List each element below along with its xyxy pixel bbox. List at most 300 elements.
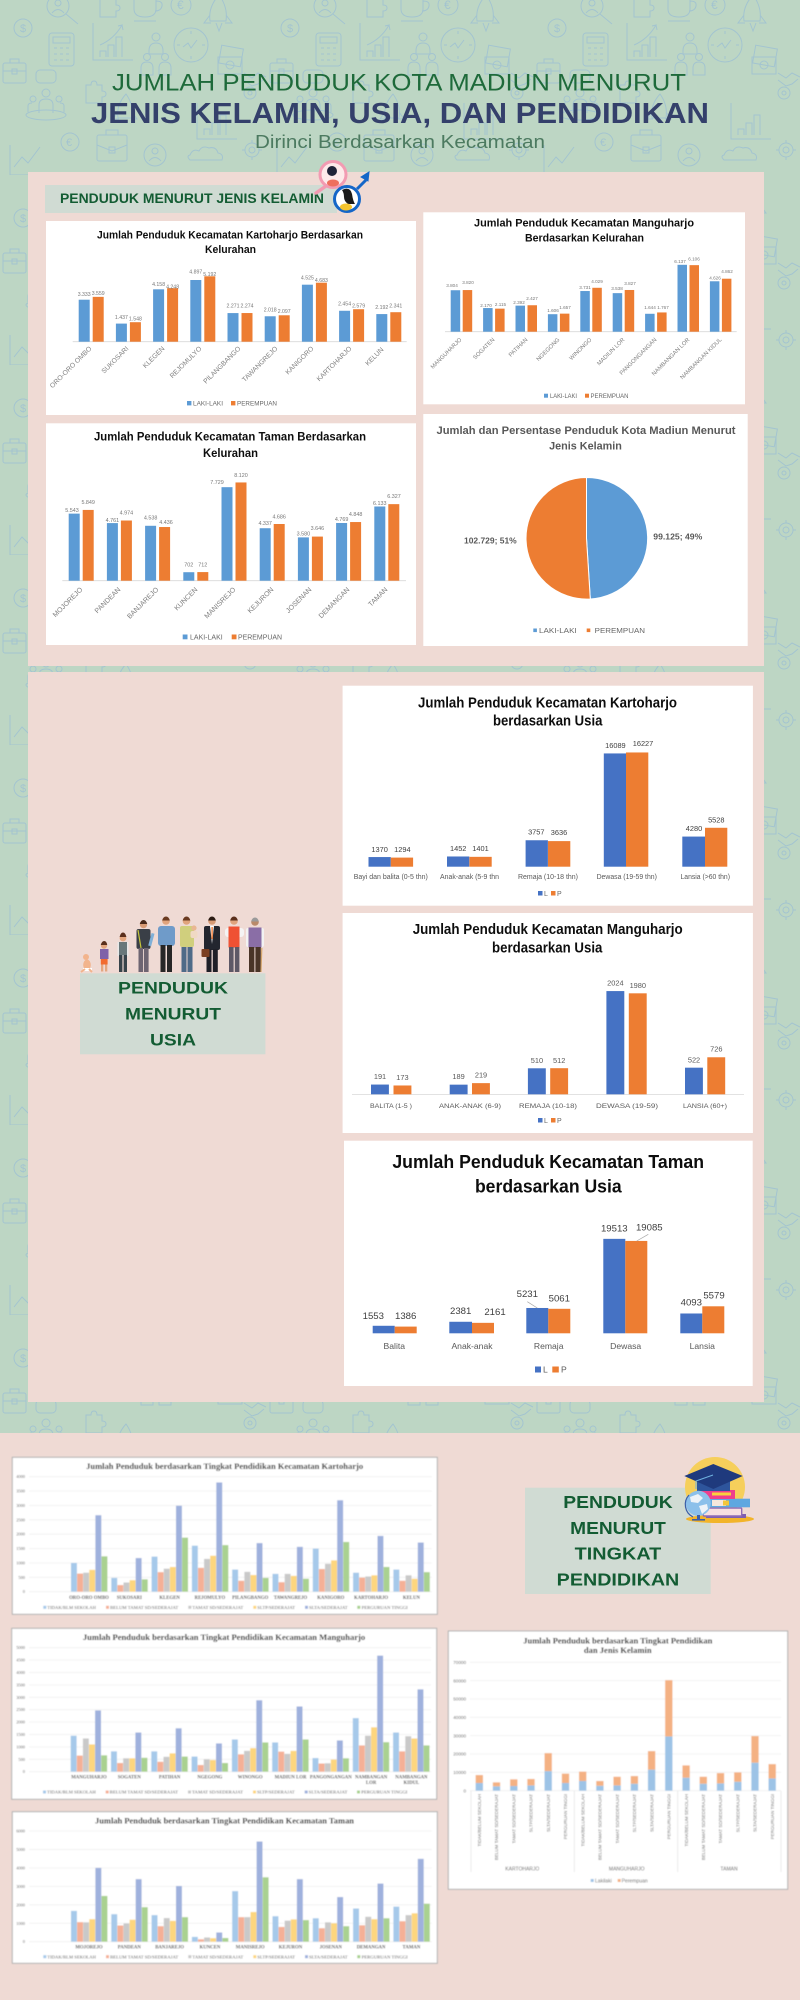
rotated category labels: SLTP/SEDERAJAT xyxy=(736,1794,740,1832)
legend: TIDAK/BLM SEKOLAH xyxy=(47,1954,97,1959)
category labels xyxy=(75,1946,421,1950)
chart title: Kelurahan xyxy=(205,244,256,256)
legend: TAMAT SD/SEDERAJAT xyxy=(192,1790,243,1795)
legend: BELUM TAMAT SD/SEDERAJAT xyxy=(110,1790,178,1795)
rotated category labels: PERGURUAN TINGGI xyxy=(563,1794,568,1839)
y axis labels: 30000 xyxy=(453,1733,466,1738)
category labels: Lansia xyxy=(690,1341,715,1351)
legend: TAMAT SD/SEDERAJAT xyxy=(192,1605,243,1610)
rotated category labels: TAMAT SD/SEDERAJAT xyxy=(512,1794,516,1843)
y axis labels: 70000 xyxy=(453,1660,466,1665)
chart title: Jenis Kelamin xyxy=(549,440,622,452)
chart title xyxy=(94,432,366,460)
y axis labels: 2000 xyxy=(16,1532,26,1537)
y axis labels: 0 xyxy=(23,1769,26,1774)
icon: graduation cap, books and globe xyxy=(684,1457,754,1523)
data labels: 2.427 xyxy=(526,296,538,301)
bars xyxy=(371,991,725,1094)
legend: L xyxy=(543,1364,548,1374)
data labels: 1553 xyxy=(363,1311,384,1322)
y axis labels: 4000 xyxy=(16,1865,26,1870)
data labels: 2161 xyxy=(484,1307,506,1318)
y axis labels: 4000 xyxy=(16,1474,26,1479)
data labels xyxy=(363,1222,725,1322)
chart: Manguharjo kelurahan xyxy=(423,212,745,404)
legend xyxy=(43,1790,408,1795)
category labels: LOR xyxy=(366,1781,377,1786)
category labels: Balita xyxy=(384,1341,405,1351)
category labels: KANIGORO xyxy=(285,345,315,376)
y axis labels: 1000 xyxy=(16,1921,26,1926)
data labels: 191 xyxy=(374,1072,386,1081)
data labels: 4.848 xyxy=(349,512,362,518)
legend: Perempuan xyxy=(622,1878,648,1884)
icon: gender symbols xyxy=(316,162,369,212)
data labels: 2381 xyxy=(450,1306,471,1317)
legend: PEREMPUAN xyxy=(238,634,282,642)
category labels: NGEGONG xyxy=(197,1776,223,1780)
y axis labels: 5000 xyxy=(16,1645,26,1650)
data labels: 5.543 xyxy=(65,508,79,514)
rotated category labels: BELUM TAMAT SD/SEDERAJAT xyxy=(598,1794,603,1860)
y axis labels: 4500 xyxy=(16,1658,26,1663)
legend: BELUM TAMAT SD/SEDERAJAT xyxy=(110,1605,179,1610)
subtitle: Dirinci Berdasarkan Kecamatan xyxy=(255,132,545,152)
data labels: 1452 xyxy=(450,844,466,853)
data labels: 510 xyxy=(531,1056,543,1065)
group labels: KARTOHARJO xyxy=(505,1866,539,1872)
category labels: PANGONGANGAN xyxy=(310,1776,352,1780)
rotated category labels: PERGURUAN TINGGI xyxy=(666,1794,672,1839)
category labels: BALITA (1-5 ) xyxy=(370,1103,412,1110)
category labels: LANSIA (60+) xyxy=(683,1103,727,1110)
y axis labels xyxy=(453,1660,466,1793)
data labels: 702 xyxy=(184,562,193,568)
category labels: WINONGO xyxy=(569,337,594,362)
category labels: Remaja xyxy=(534,1341,564,1351)
category labels xyxy=(384,1341,715,1351)
data labels: 4.436 xyxy=(159,520,173,526)
legend: PEREMPUAN xyxy=(590,394,628,400)
legend xyxy=(538,891,562,898)
category labels: PILANGBANGO xyxy=(202,345,242,385)
y axis labels: 3500 xyxy=(16,1682,26,1687)
y axis labels: 6000 xyxy=(16,1828,26,1834)
y axis labels: 1500 xyxy=(16,1732,26,1737)
rotated category labels: SLTP/SEDERAJAT xyxy=(529,1794,534,1832)
group labels: MANGUHARJO xyxy=(609,1866,645,1872)
category labels: NGEGONG xyxy=(536,337,562,363)
data labels: 6.327 xyxy=(387,494,401,500)
chart title: Jumlah dan Persentase Penduduk Kota Madiun Menurut xyxy=(436,425,736,437)
y axis labels: 3000 xyxy=(16,1884,26,1889)
data labels: 2.018 xyxy=(264,308,277,314)
heading: penduduk menurut usia: PENDUDUK xyxy=(118,978,229,998)
heading: penduduk menurut usia: MENURUT xyxy=(125,1004,222,1024)
data labels xyxy=(371,739,725,854)
legend: P xyxy=(557,891,562,898)
data labels: 2.392 xyxy=(513,300,525,305)
category labels: REMAJA (10-18) xyxy=(519,1103,577,1110)
category labels: KIDUL xyxy=(404,1781,419,1786)
data labels: 4.761 xyxy=(106,518,119,524)
category labels: SUKOSARI xyxy=(117,1596,142,1601)
data labels: 3636 xyxy=(551,828,567,837)
category labels xyxy=(69,1596,420,1601)
data labels xyxy=(446,256,733,313)
category labels: KLEGEN xyxy=(159,1596,180,1601)
data labels: 4.029 xyxy=(591,279,603,284)
rotated category labels: TIDAK/BELUM SEKOLAH xyxy=(477,1794,482,1847)
heading: penduduk menurut tingkat pendidikan: MENURUT xyxy=(570,1518,666,1538)
data labels: 4.686 xyxy=(272,514,286,520)
chart title xyxy=(523,1636,713,1655)
category labels: KANIGORO xyxy=(317,1596,345,1601)
y axis labels xyxy=(16,1828,26,1944)
legend: LAKI-LAKI xyxy=(193,400,223,408)
data labels: 4.769 xyxy=(335,517,348,523)
category labels: SUKOSARI xyxy=(101,345,130,375)
chart title: Jumlah Penduduk berdasarkan Tingkat Pendidikan Kecamatan Manguharjo xyxy=(83,1633,365,1642)
chart title xyxy=(436,425,736,452)
legend: LAKI-LAKI xyxy=(550,394,577,400)
chart title: Jumlah Penduduk Kecamatan Manguharjo xyxy=(474,218,694,230)
data labels: 2.579 xyxy=(352,304,365,310)
category labels: ANAK-ANAK (6-9) xyxy=(439,1103,501,1110)
category labels: KLEGEN xyxy=(142,345,166,370)
data labels: 3.580 xyxy=(297,532,310,538)
legend: SLTA/SEDERAJAT xyxy=(309,1954,348,1959)
chart title: Jumlah Penduduk Kecamatan Manguharjo xyxy=(413,921,683,938)
pie labels: 99.125; 49% xyxy=(653,532,702,542)
chart: Manguharjo usia xyxy=(343,913,753,1133)
legend: SLTP/SEDERAJAT xyxy=(257,1605,295,1610)
category labels: MOJOREJO xyxy=(52,586,85,619)
chart title: Jumlah Penduduk Kecamatan Taman xyxy=(392,1152,704,1172)
category labels: BANJAREJO xyxy=(126,586,161,621)
y axis labels xyxy=(16,1474,26,1594)
chart: pendidikan Manguharjo xyxy=(12,1628,437,1799)
category labels: PANDEAN xyxy=(94,586,122,615)
data labels: 3.333 xyxy=(78,292,91,298)
data labels: 4.337 xyxy=(258,521,272,527)
legend xyxy=(535,1364,567,1374)
bars xyxy=(368,752,727,867)
data labels: 1386 xyxy=(395,1311,416,1322)
data labels: 4.862 xyxy=(721,269,733,274)
y axis labels: 3500 xyxy=(16,1489,26,1494)
data labels: 19085 xyxy=(636,1222,663,1234)
rotated category labels: TIDAK/BELUM SEKOLAH xyxy=(580,1794,585,1847)
category labels: KARTOHARJO xyxy=(354,1596,388,1601)
legend xyxy=(533,628,645,635)
chart title: berdasarkan Usia xyxy=(492,940,603,956)
category labels: MOJOREJO xyxy=(75,1946,103,1950)
panel: usia background xyxy=(28,672,764,1402)
legend xyxy=(591,1878,648,1884)
y axis labels: 1000 xyxy=(16,1560,26,1566)
category labels: MADIUN LOR xyxy=(275,1776,307,1780)
category labels: PILANGBANGO xyxy=(232,1596,269,1601)
chart title xyxy=(392,1152,704,1196)
data labels: 4.158 xyxy=(152,282,165,288)
bars xyxy=(79,276,401,342)
data labels: 1.644 xyxy=(644,305,656,310)
data labels: 522 xyxy=(688,1056,700,1064)
bars xyxy=(71,1482,430,1592)
category labels: KELUN xyxy=(403,1596,420,1601)
chart title: Jumlah Penduduk Kecamatan Kartoharjo xyxy=(418,694,677,712)
data labels: 2.115 xyxy=(495,302,507,307)
heading: penduduk menurut usia xyxy=(80,973,265,1054)
chart: pie jenis kelamin xyxy=(423,414,748,646)
category labels: TAWANGREJO xyxy=(241,345,279,384)
category labels: Dewasa (19-59 thn) xyxy=(597,874,657,881)
chart title: berdasarkan Usia xyxy=(493,712,603,730)
legend: SLTP/SEDERAJAT xyxy=(257,1954,295,1959)
data labels: 5.849 xyxy=(81,500,95,506)
category labels: REJOMULYO xyxy=(195,1596,226,1601)
category labels: KARTOHARJO xyxy=(316,345,353,383)
rotated category labels: TAMAT SD/SEDERAJAT xyxy=(718,1794,723,1843)
chart: Kartoharjo kelurahan xyxy=(46,221,416,415)
category labels: ORO-ORO OMBO xyxy=(49,345,93,390)
chart title: Jumlah Penduduk Kecamatan Taman Berdasarkan xyxy=(94,432,366,444)
legend xyxy=(187,400,277,408)
category labels: Anak-anak (5-9 thn xyxy=(440,874,499,881)
data labels: 6.106 xyxy=(688,256,700,262)
chart: pendidikan dan jenis kelamin stacked xyxy=(448,1631,788,1889)
y axis labels: 2500 xyxy=(16,1517,26,1522)
chart title: Berdasarkan Kelurahan xyxy=(525,232,644,244)
legend xyxy=(43,1954,408,1959)
data labels: 5.192 xyxy=(203,272,216,278)
y axis labels: 50000 xyxy=(453,1697,466,1702)
heading: penduduk menurut jenis kelamin xyxy=(45,185,337,213)
y axis labels: 0 xyxy=(23,1939,26,1944)
y axis labels: 0 xyxy=(463,1788,466,1793)
data labels: 2.192 xyxy=(375,305,388,311)
category labels: WINONGO xyxy=(238,1776,263,1780)
data labels: 3.559 xyxy=(92,291,105,297)
data labels: 726 xyxy=(710,1044,722,1054)
heading: penduduk menurut tingkat pendidikan: TINGKAT xyxy=(575,1544,662,1564)
data labels: 3.820 xyxy=(462,280,474,285)
y axis labels: 3000 xyxy=(16,1695,26,1700)
category labels: MADIUN LOR xyxy=(596,337,626,367)
category labels: TAWANGREJO xyxy=(274,1596,308,1601)
y axis labels: 500 xyxy=(18,1757,26,1762)
title line 2: JENIS KELAMIN, USIA, DAN PENDIDIKAN xyxy=(91,98,709,130)
panel: jenis kelamin background xyxy=(28,172,764,666)
pie xyxy=(526,477,648,599)
data labels: 3757 xyxy=(528,828,545,836)
chart: Kartoharjo usia xyxy=(343,686,753,906)
y axis labels: 2500 xyxy=(16,1707,26,1712)
rotated category labels: BELUM TAMAT SD/SEDERAJAT xyxy=(701,1794,706,1860)
chart title: Jumlah Penduduk berdasarkan Tingkat Pendidikan Kecamatan Kartoharjo xyxy=(86,1462,363,1471)
category labels: MANISREJO xyxy=(236,1946,265,1950)
data labels: 1.657 xyxy=(559,305,571,310)
chart title: Jumlah Penduduk berdasarkan Tingkat Pendidikan xyxy=(523,1636,713,1646)
category labels: Bayi dan balita (0-5 thn) xyxy=(354,874,428,881)
rotated category labels: SLTA/SEDERAJAT xyxy=(753,1794,758,1832)
rotated category labels: SLTA/SEDERAJAT xyxy=(649,1794,654,1832)
data labels: 219 xyxy=(475,1070,487,1080)
y axis labels: 5000 xyxy=(16,1847,26,1852)
illustration: people by age xyxy=(81,916,264,972)
legend: L xyxy=(544,891,548,898)
data labels: 5231 xyxy=(517,1289,538,1300)
category labels: MANGUHARJO xyxy=(430,337,464,371)
group labels: TAMAN xyxy=(720,1866,738,1872)
legend: LAKI-LAKI xyxy=(190,634,223,642)
category labels: ORO-ORO OMBO xyxy=(69,1596,109,1601)
data labels: 19513 xyxy=(601,1224,628,1234)
data labels: 3.538 xyxy=(611,286,623,291)
category labels xyxy=(354,874,730,881)
leader lines xyxy=(527,1234,648,1308)
category labels: BANJAREJO xyxy=(155,1946,184,1950)
category labels: Remaja (10-18 thn) xyxy=(518,874,578,881)
category labels: DEMANGAN xyxy=(357,1946,386,1950)
category labels: NAMBANGAN xyxy=(395,1776,428,1780)
data labels: 6.133 xyxy=(373,501,387,507)
legend: PERGURUAN TINGGI xyxy=(361,1790,408,1795)
y axis labels: 20000 xyxy=(453,1752,466,1757)
legend: PERGURUAN TINGGI xyxy=(362,1954,408,1959)
y axis labels: 4000 xyxy=(16,1670,26,1675)
data labels xyxy=(374,978,722,1082)
category labels: KEJURON xyxy=(279,1946,303,1950)
data labels: 1.548 xyxy=(129,316,142,322)
pie labels xyxy=(464,532,702,546)
stacked bars xyxy=(476,1680,776,1791)
legend: LAKI-LAKI xyxy=(539,628,577,635)
data labels: 1.437 xyxy=(115,315,128,321)
category labels: PATIHAN xyxy=(508,337,529,359)
legend: SLTP/SEDERAJAT xyxy=(257,1790,295,1795)
y axis labels: 500 xyxy=(18,1575,26,1580)
data labels: 4.626 xyxy=(709,276,721,280)
rotated category labels: SLTP/SEDERAJAT xyxy=(632,1794,637,1832)
y axis labels: 1500 xyxy=(16,1546,26,1551)
category labels: JOSENAN xyxy=(285,586,313,615)
rotated category labels: SLTA/SEDERAJAT xyxy=(546,1794,551,1832)
bars xyxy=(373,1239,724,1333)
data labels: 8.120 xyxy=(234,473,248,479)
legend: TAMAT SD/SEDERAJAT xyxy=(192,1954,243,1959)
y axis labels: 2000 xyxy=(16,1902,26,1907)
y axis labels: 0 xyxy=(23,1589,26,1594)
data labels: 2.170 xyxy=(480,303,492,308)
heading: penduduk menurut tingkat pendidikan xyxy=(525,1488,711,1594)
legend: PERGURUAN TINGGI xyxy=(362,1605,408,1610)
data labels: 3.804 xyxy=(446,283,458,288)
category labels: PANGONGANGAN xyxy=(619,337,658,377)
category labels xyxy=(370,1103,727,1110)
category labels: PATIHAN xyxy=(159,1776,181,1780)
chart title xyxy=(418,694,677,730)
data labels: 4093 xyxy=(681,1298,702,1308)
data labels: 4.525 xyxy=(301,276,314,282)
data labels xyxy=(78,270,402,322)
category labels: JOSENAN xyxy=(320,1946,343,1950)
data labels: 2024 xyxy=(607,978,624,988)
data labels: 1.767 xyxy=(657,305,669,310)
legend: P xyxy=(557,1118,562,1125)
category labels: Dewasa xyxy=(610,1341,641,1351)
data labels: 1370 xyxy=(371,845,388,854)
category labels: TAMAN xyxy=(403,1946,421,1950)
category labels: KUNCEN xyxy=(174,586,199,612)
category labels: Anak-anak xyxy=(451,1341,493,1351)
panel: pendidikan background xyxy=(0,1433,800,2000)
legend xyxy=(544,394,628,400)
category labels: MANGUHARJO xyxy=(71,1776,107,1780)
title line 1: JUMLAH PENDUDUK KOTA MADIUN MENURUT xyxy=(112,69,686,96)
legend: BELUM TAMAT SD/SEDERAJAT xyxy=(110,1954,179,1959)
y axis labels: 40000 xyxy=(453,1715,466,1720)
legend: PEREMPUAN xyxy=(237,400,277,408)
category labels: KELUN xyxy=(364,346,385,367)
heading: penduduk menurut usia: USIA xyxy=(150,1030,196,1050)
category labels: NAMBANGAN LOR xyxy=(651,337,691,377)
data labels: 4.248 xyxy=(166,284,179,290)
data labels: 5061 xyxy=(549,1294,570,1304)
bars xyxy=(69,482,399,581)
data labels: 4280 xyxy=(686,824,702,833)
data labels: 4.897 xyxy=(189,270,202,276)
legend: SLTA/SEDERAJAT xyxy=(309,1605,348,1610)
category labels: DEWASA (19-59) xyxy=(596,1103,658,1110)
category labels: SOGATEN xyxy=(472,337,496,361)
data labels: 712 xyxy=(198,562,207,568)
data labels: 2.274 xyxy=(241,304,254,310)
data labels: 1401 xyxy=(472,844,489,853)
y axis labels: 60000 xyxy=(453,1678,466,1683)
legend xyxy=(43,1605,408,1610)
data labels: 3.646 xyxy=(311,526,324,532)
chart title: Jumlah Penduduk Kecamatan Kartoharjo Berdasarkan xyxy=(97,230,363,242)
legend: L xyxy=(544,1118,548,1125)
category labels xyxy=(49,345,385,390)
chart: pendidikan Taman xyxy=(12,1812,437,1963)
category labels: TAMAN xyxy=(368,586,389,608)
legend: PEREMPUAN xyxy=(595,628,645,635)
pie labels: 102.729; 51% xyxy=(464,536,517,546)
chart: pendidikan Kartoharjo xyxy=(12,1457,437,1614)
legend: P xyxy=(561,1364,567,1374)
data labels: 16089 xyxy=(605,741,626,750)
legend: TIDAK/BLM SEKOLAH xyxy=(47,1605,97,1610)
chart title xyxy=(474,218,694,244)
category labels: NAMBANGAN KIDUL xyxy=(680,337,724,381)
data labels: 6.137 xyxy=(674,259,686,264)
data labels xyxy=(65,473,401,568)
data labels: 3.827 xyxy=(624,281,636,286)
data labels: 1.606 xyxy=(547,308,559,313)
data labels: 189 xyxy=(452,1072,465,1081)
data labels: 173 xyxy=(396,1073,409,1082)
heading: penduduk menurut tingkat pendidikan: PENDUDUK xyxy=(563,1492,673,1512)
category labels xyxy=(52,586,389,621)
bars xyxy=(451,265,731,332)
category labels: NAMBANGAN xyxy=(355,1776,388,1780)
heading: penduduk menurut jenis kelamin: PENDUDUK MENURUT JENIS KELAMIN xyxy=(60,191,324,206)
chart: Taman kelurahan xyxy=(46,423,416,645)
data labels: 2.271 xyxy=(227,304,240,310)
